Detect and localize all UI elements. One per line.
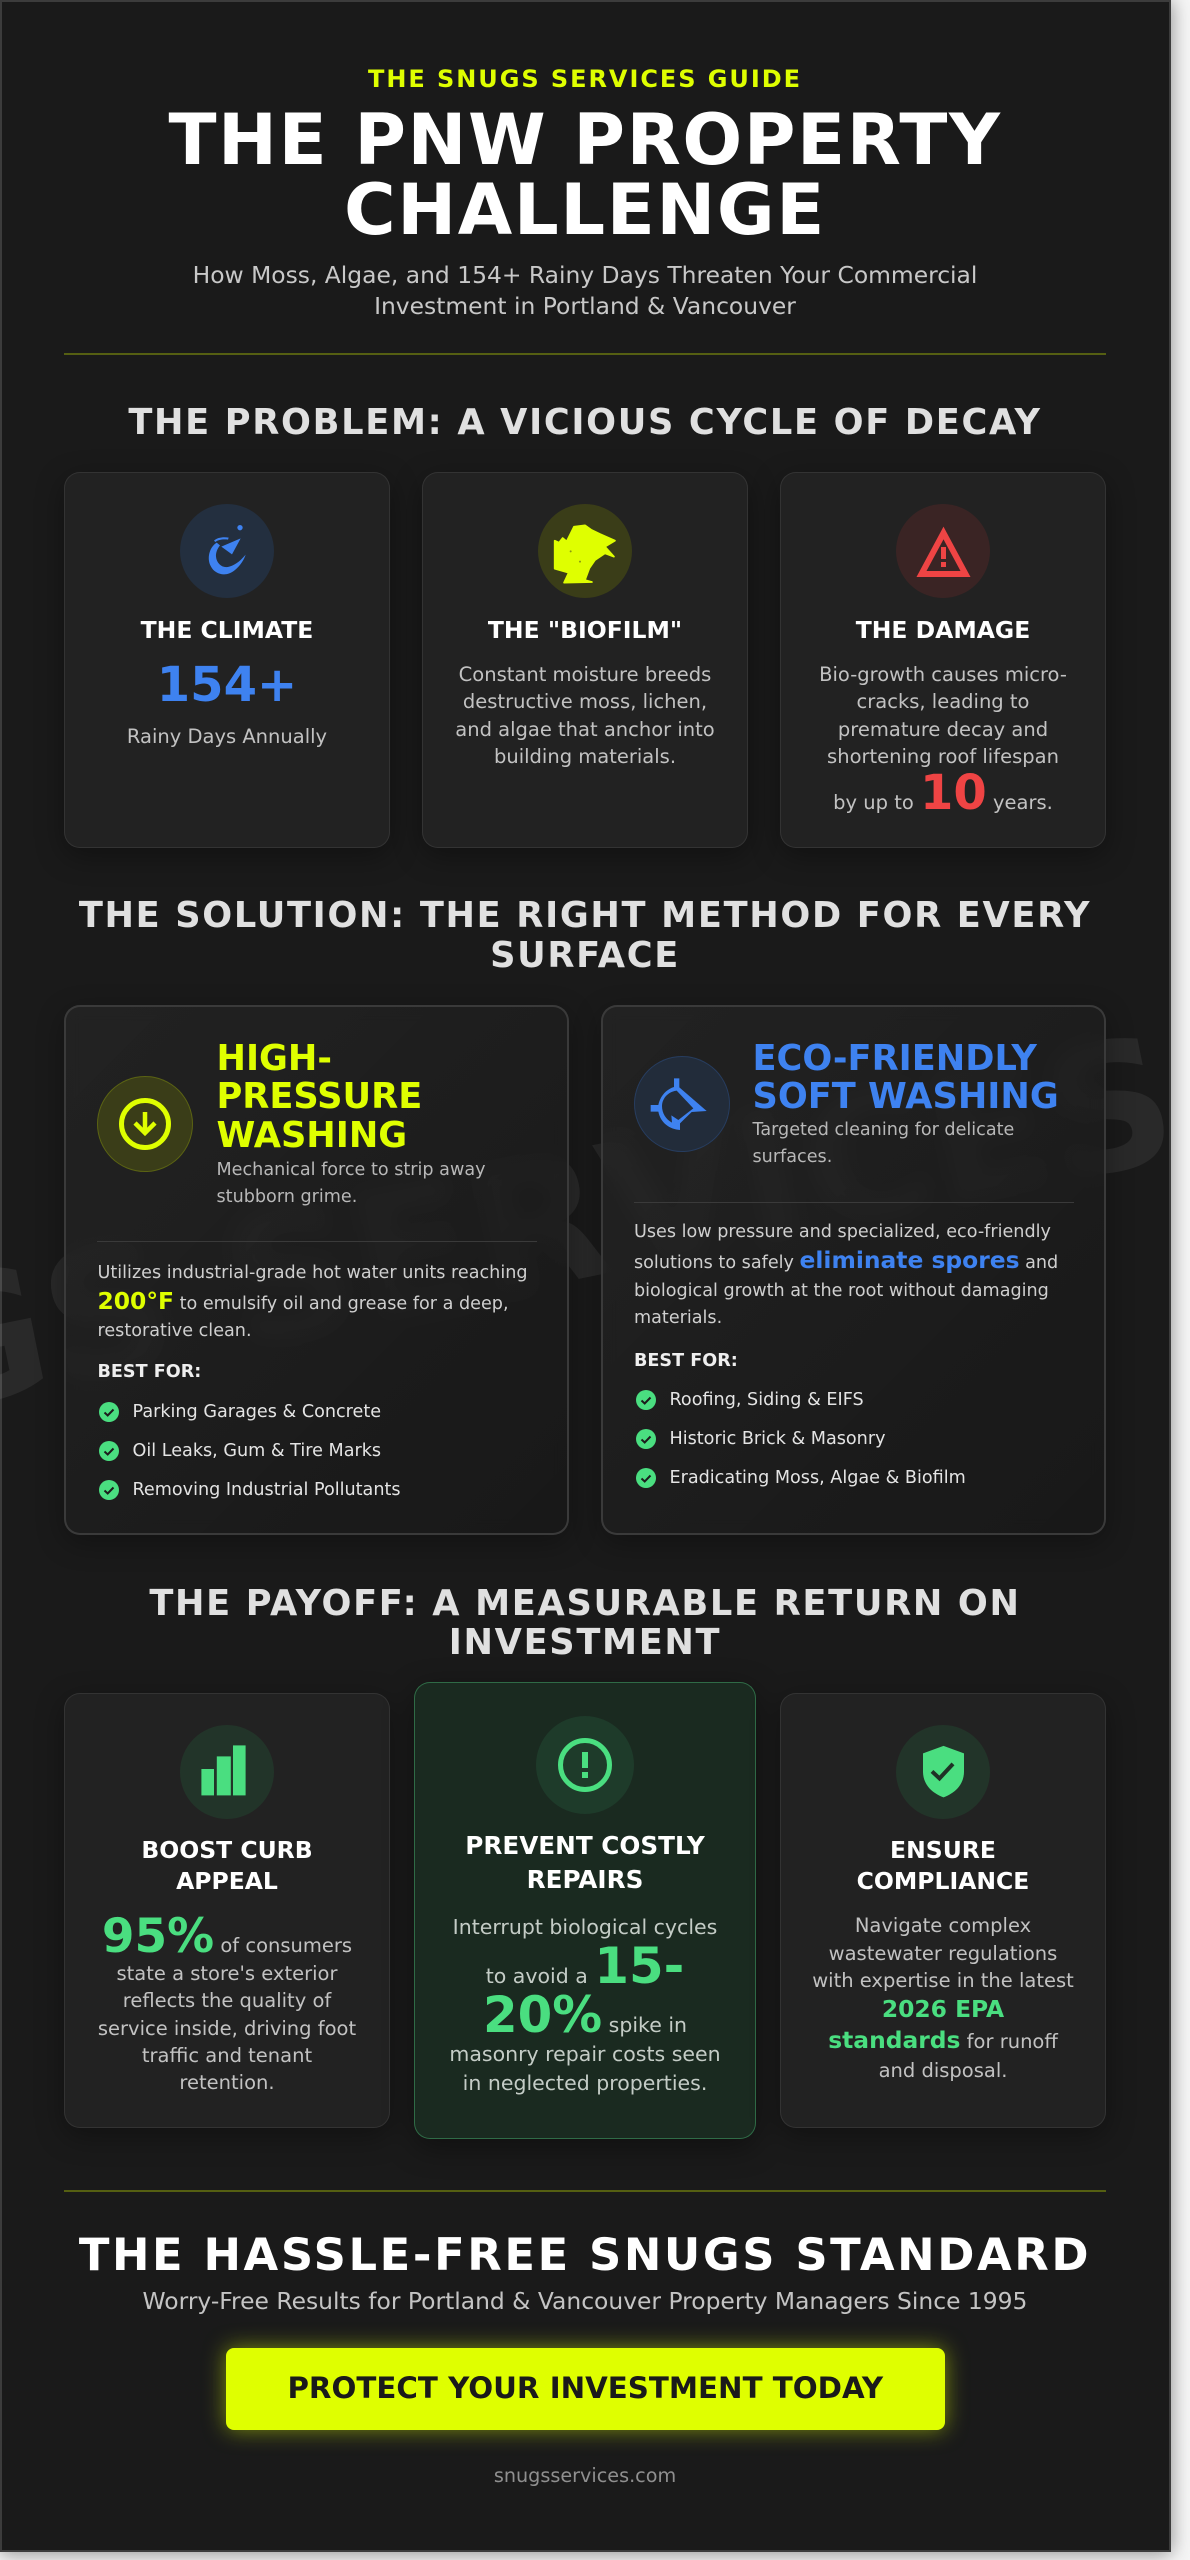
card divider <box>634 1202 1074 1203</box>
card text: destructive moss, lichen, <box>463 690 707 713</box>
panel: the biofilm <box>422 472 748 848</box>
heading: the solution: THE SOLUTION: THE RIGHT METHOD FOR EVERY <box>79 894 1091 936</box>
call to action button: PROTECT YOUR INVESTMENT TODAY <box>287 2371 883 2405</box>
card title: COMPLIANCE <box>857 1867 1029 1895</box>
method title: HIGH- <box>216 1038 332 1078</box>
method description: solutions to safely eliminate spores and <box>634 1246 1058 1274</box>
footer subtitle: Worry-Free Results for Portland & Vancouver Property Managers Since 1995 <box>143 2287 1027 2315</box>
method description: materials. <box>634 1308 722 1328</box>
method description: 200°F to emulsify oil and grease for a deep, <box>98 1287 509 1315</box>
card text: and disposal. <box>879 2059 1007 2082</box>
card text <box>98 1909 356 2094</box>
heading: the payoff <box>149 1582 1021 1663</box>
method subtitle: Targeted cleaning for delicate <box>752 1120 1014 1140</box>
icon: biofilm growth <box>538 504 632 598</box>
call to action button <box>226 2348 945 2430</box>
card text: Interrupt biological cycles <box>453 1915 717 1939</box>
card text: Navigate complex <box>855 1914 1031 1937</box>
method title: ECO-FRIENDLY <box>752 1038 1037 1078</box>
icon: warning triangle <box>896 504 990 598</box>
card text: shortening roof lifespan <box>827 745 1059 768</box>
divider <box>64 353 1106 355</box>
card title: THE CLIMATE <box>141 616 313 644</box>
list item: Removing Industrial Pollutants <box>132 1480 401 1500</box>
card title <box>465 1831 705 1894</box>
card title: THE "BIOFILM" <box>488 616 682 644</box>
subtitle <box>193 260 977 320</box>
method title <box>216 1038 422 1156</box>
icon: soft wash <box>634 1056 730 1152</box>
method title: WASHING <box>216 1115 407 1156</box>
card title: PREVENT COSTLY <box>465 1831 705 1860</box>
best for list <box>99 1402 401 1500</box>
card title: REPAIRS <box>527 1865 643 1894</box>
website link: snugsservices.com <box>494 2464 676 2487</box>
icon: bar chart <box>180 1725 274 1819</box>
card text <box>449 1915 721 2095</box>
title: CHALLENGE <box>344 169 826 251</box>
list item: Historic Brick & Masonry <box>670 1429 885 1449</box>
panel: boost curb appeal <box>64 1693 390 2128</box>
method subtitle: surfaces. <box>752 1147 832 1167</box>
icon: alert circle <box>536 1716 634 1814</box>
card title: THE DAMAGE <box>856 616 1030 644</box>
icon: rain climate <box>180 504 274 598</box>
card text: cracks, leading to <box>857 690 1029 713</box>
kicker: THE SNUGS SERVICES GUIDE <box>368 65 802 93</box>
best for label: BEST FOR: <box>98 1362 201 1382</box>
stat line: 10 years: by up to 10 years. <box>833 765 1053 821</box>
icon: pressure gauge <box>97 1076 193 1172</box>
method subtitle: Mechanical force to strip away <box>216 1160 486 1180</box>
panel: the damage <box>780 472 1106 848</box>
card text: Bio-growth causes micro- <box>819 663 1067 686</box>
method subtitle: stubborn grime. <box>216 1187 357 1207</box>
card divider <box>97 1241 537 1242</box>
divider <box>64 2190 1106 2192</box>
card text: state a store's exterior <box>116 1962 338 1985</box>
card text: masonry repair costs seen <box>449 2042 721 2066</box>
method title <box>752 1038 1059 1117</box>
card text: standards for runoff <box>828 2026 1058 2054</box>
heading: the solution: SURFACE <box>490 934 680 976</box>
card text: in neglected properties. <box>463 2071 707 2095</box>
card text <box>455 663 715 768</box>
card text: traffic and tenant <box>142 2044 312 2067</box>
card text: with expertise in the latest <box>812 1969 1074 1992</box>
method description <box>98 1263 528 1341</box>
stat caption: Rainy Days Annually <box>127 725 327 748</box>
panel: high-pressure washing <box>64 1005 569 1535</box>
card text: to avoid a 15- <box>486 1937 684 1995</box>
card text <box>812 1914 1074 2082</box>
subtitle: How Moss, Algae, and 154+ Rainy Days Threaten Your Commercial <box>193 260 977 288</box>
panel: ensure compliance <box>780 1693 1106 2128</box>
card title <box>857 1836 1029 1895</box>
card text: 20% spike in <box>483 1986 687 2044</box>
card text: 95% of consumers <box>102 1909 352 1964</box>
method description: Utilizes industrial-grade hot water units reaching <box>98 1263 528 1283</box>
method description: biological growth at the root without damaging <box>634 1281 1049 1301</box>
card text: building materials. <box>494 745 676 768</box>
footer heading: THE HASSLE-FREE SNUGS STANDARD <box>79 2228 1091 2280</box>
method subtitle <box>752 1120 1014 1167</box>
heading: the solution <box>79 894 1091 976</box>
method title: PRESSURE <box>216 1076 422 1117</box>
subtitle: Investment in Portland & Vancouver <box>374 292 796 320</box>
card title: APPEAL <box>176 1867 278 1895</box>
card text: and algae that anchor into <box>455 718 715 741</box>
card title <box>141 1836 313 1895</box>
best for list <box>636 1390 966 1488</box>
stat: 154+: 154+ <box>157 656 297 712</box>
card text: reflects the quality of <box>123 1989 331 2012</box>
list item: Eradicating Moss, Algae & Biofilm <box>670 1468 966 1488</box>
card text <box>819 663 1067 768</box>
list item: Oil Leaks, Gum & Tire Marks <box>132 1441 381 1461</box>
title: THE PNW PROPERTY <box>168 98 1002 180</box>
card text: premature decay and <box>838 718 1048 741</box>
heading: the payoff: INVESTMENT <box>449 1622 721 1663</box>
method description <box>634 1222 1058 1328</box>
best for label: BEST FOR: <box>634 1351 738 1371</box>
card text: retention. <box>179 2071 275 2094</box>
card title: BOOST CURB <box>141 1836 313 1864</box>
panel: the climate <box>64 472 390 848</box>
method subtitle <box>216 1160 486 1207</box>
list item: Parking Garages & Concrete <box>132 1402 381 1422</box>
card text: 2026 EPA <box>882 1995 1004 2023</box>
icon: shield check <box>896 1725 990 1819</box>
list item: Roofing, Siding & EIFS <box>670 1390 864 1410</box>
card text: service inside, driving foot <box>98 2017 356 2040</box>
card text: Constant moisture breeds <box>459 663 711 686</box>
panel: eco-friendly soft washing <box>601 1005 1106 1535</box>
title <box>168 98 1002 251</box>
heading: the problem: THE PROBLEM: A VICIOUS CYCLE OF DECAY <box>128 402 1042 442</box>
heading: the payoff: THE PAYOFF: A MEASURABLE RETURN ON <box>149 1582 1021 1624</box>
method description: Uses low pressure and specialized, eco-friendly <box>634 1222 1051 1242</box>
panel: prevent costly repairs <box>414 1682 756 2139</box>
method title: SOFT WASHING <box>752 1076 1059 1117</box>
card text: wastewater regulations <box>829 1942 1057 1965</box>
card title: ENSURE <box>890 1836 996 1864</box>
method description: restorative clean. <box>98 1321 252 1341</box>
